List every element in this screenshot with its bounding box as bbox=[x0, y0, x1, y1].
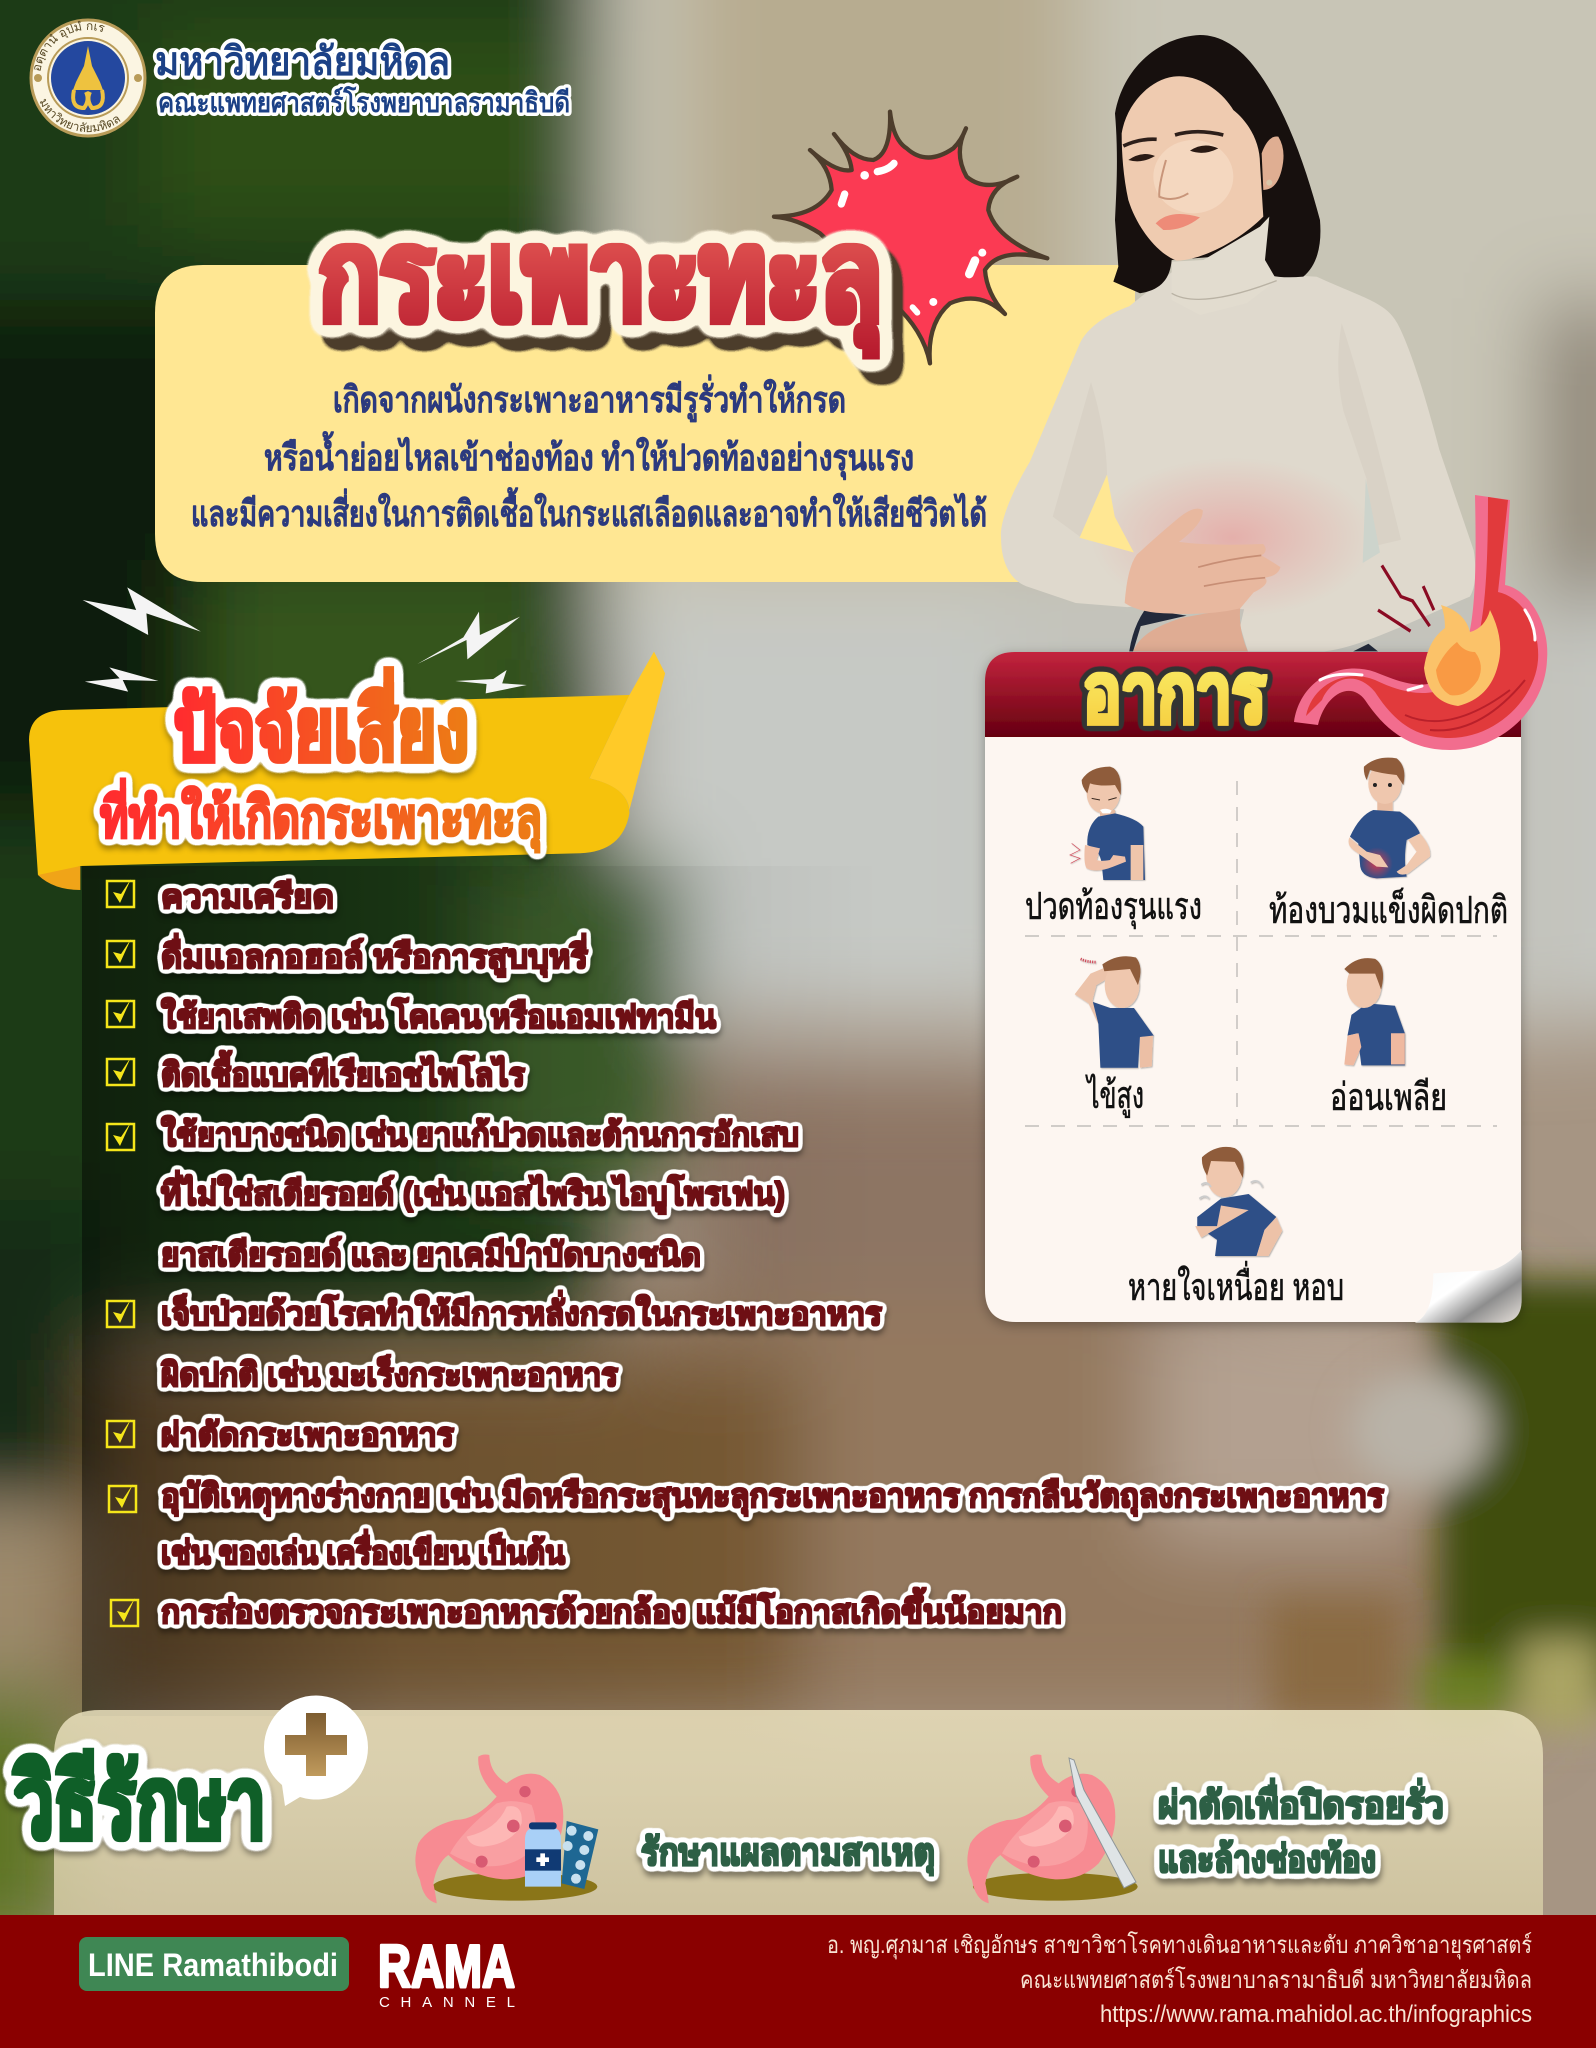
logo: Mahidol University seal: มหาวิทยาลัยมหิดล bbox=[40, 98, 120, 132]
heading: risk factors: ที่ทำให้เกิดกระเพาะทะลุ bbox=[100, 778, 542, 853]
sweater and hands bbox=[1001, 273, 1475, 651]
symptom: abdominal distension bbox=[1269, 758, 1508, 932]
icon: stomach with medicine bbox=[415, 1754, 598, 1903]
risk item 5: ใช้ยาบางชนิด เช่น ยาแก้ปวดและต้านการอักเสบ bbox=[161, 1115, 799, 1153]
risk item 6: ผิดปกติ เช่น มะเร็งกระเพาะอาหาร bbox=[161, 1354, 618, 1393]
text: surgery to close leak: ผ่าตัดเพื่อปิดรอยรั่ว bbox=[1158, 1778, 1444, 1827]
logo: Mahidol University seal: อตฺตานํ อุปมํ กเร bbox=[34, 20, 105, 71]
logo: RAMA Channel bbox=[378, 1933, 515, 2011]
title: กระเพาะทะลุ bbox=[319, 202, 882, 358]
risk item 7: ผ่าตัดกระเพาะอาหาร bbox=[161, 1416, 454, 1453]
symptom: fatigue: อ่อนเพลีย bbox=[1330, 1077, 1447, 1119]
description text: เกิดจากผนังกระเพาะอาหารมีรูรั่วทำให้กรด bbox=[333, 374, 846, 423]
risk item 4: ติดเชื้อแบคทีเรียเอชไพโลไร bbox=[161, 1050, 525, 1093]
risk item 6: เจ็บป่วยด้วยโรคทำให้มีการหลั่งกรดในกระเพาะอาหาร bbox=[161, 1290, 882, 1332]
heading: treatment: วิธีรักษา bbox=[13, 1746, 266, 1860]
logo: RAMA Channel: CHANNEL bbox=[379, 1994, 515, 2011]
text: treat wound by cause: รักษาแผลตามสาเหตุ bbox=[641, 1832, 935, 1876]
head bbox=[1113, 35, 1320, 315]
description text: และมีความเสี่ยงในการติดเชื้อในกระแสเลือดและอาจทำให้เสียชีวิตได้ bbox=[191, 487, 987, 534]
symptom: fatigue bbox=[1330, 958, 1447, 1119]
symptom: high fever bbox=[1075, 956, 1154, 1118]
text: surgery to close leak: และล้างช่องท้อง bbox=[1158, 1839, 1376, 1881]
symptom: severe abdominal pain: ปวดท้องรุนแรง bbox=[1025, 886, 1202, 929]
risk item 3: ใช้ยาเสพติด เช่น โคเคน หรือแอมเฟทามีน bbox=[161, 997, 716, 1035]
symptom: abdominal distension: ท้องบวมแข็งผิดปกติ bbox=[1269, 887, 1508, 932]
symptom grid dividers bbox=[1025, 781, 1497, 1126]
description text: หรือน้ำย่อยไหลเข้าช่องท้อง ทำให้ปวดท้องอย่างรุนแรง bbox=[264, 431, 914, 481]
text: surgery to close leak bbox=[1158, 1778, 1444, 1881]
footer band bbox=[0, 1915, 1596, 2048]
symptom: high fever: ไข้สูง bbox=[1085, 1074, 1144, 1118]
icon: lightning bolts bbox=[83, 587, 527, 693]
icon: stomach with scalpel bbox=[967, 1754, 1138, 1903]
icon: red starburst bbox=[774, 112, 1047, 363]
heading: risk factors bbox=[100, 668, 542, 853]
risk item 5: ยาสเตียรอยด์ และ ยาเคมีบำบัดบางชนิด bbox=[161, 1236, 701, 1273]
credits text bbox=[827, 1931, 1532, 2028]
heading: symptoms: อาการ bbox=[1083, 646, 1266, 740]
heading: risk factors: ปัจจัยเสี่ยง bbox=[174, 668, 469, 779]
icon: stomach with flame bbox=[1294, 495, 1547, 750]
risk factor list bbox=[107, 878, 1384, 1630]
risk item 9: การส่องตรวจกระเพาะอาหารด้วยกล้อง แม้มีโอกาสเกิดขึ้นน้อยมาก bbox=[161, 1587, 1062, 1630]
panel: symptoms card bbox=[985, 652, 1522, 1323]
icon: speech bubble with plus bbox=[264, 1696, 368, 1806]
risk item 8 bbox=[109, 1477, 1384, 1571]
button: LINE Ramathibodi: LINE Ramathibodi bbox=[88, 1947, 338, 1983]
credits text: https://www.rama.mahidol.ac.th/infographics bbox=[1100, 2001, 1532, 2028]
photo: woman holding stomach bbox=[1001, 35, 1475, 651]
risk item 1: ความเครียด bbox=[161, 878, 334, 915]
risk item 8: อุบัติเหตุทางร่างกาย เช่น มีดหรือกระสุนทะลุกระเพาะอาหาร การกลืนวัตถุลงกระเพาะอาหาร bbox=[161, 1477, 1384, 1517]
heading: university name: คณะแพทยศาสตร์โรงพยาบาลรามาธิบดี bbox=[158, 85, 570, 118]
logo: RAMA Channel: RAMA bbox=[378, 1933, 515, 2000]
risk item 6 bbox=[107, 1290, 882, 1393]
banner: risk factors ribbon bbox=[29, 652, 665, 890]
risk item 2: ดื่มแอลกอฮอล์ หรือการสูบบุหรี่ bbox=[161, 933, 588, 978]
panel: yellow description box bbox=[155, 265, 1135, 582]
symptom: shortness of breath: หายใจเหนื่อย หอบ bbox=[1128, 1261, 1344, 1309]
heading: university name: มหาวิทยาลัยมหิดล bbox=[155, 40, 450, 84]
risk item 5: ที่ไม่ใช่สเตียรอยด์ (เช่น แอสไพริน ไอบูโพรเฟน) bbox=[161, 1170, 785, 1215]
risk item 8: เช่น ของเล่น เครื่องเขียน เป็นต้น bbox=[161, 1529, 565, 1571]
logo: Mahidol University seal bbox=[30, 18, 146, 138]
button: LINE Ramathibodi bbox=[79, 1937, 349, 1991]
panel: treatment bbox=[54, 1710, 1543, 1915]
description text bbox=[191, 374, 987, 534]
risk item 5 bbox=[107, 1115, 799, 1273]
symptom: shortness of breath bbox=[1128, 1147, 1344, 1309]
heading: university name bbox=[155, 40, 570, 118]
dark list backing panel bbox=[82, 866, 882, 1716]
symptom: severe abdominal pain bbox=[1025, 767, 1202, 929]
